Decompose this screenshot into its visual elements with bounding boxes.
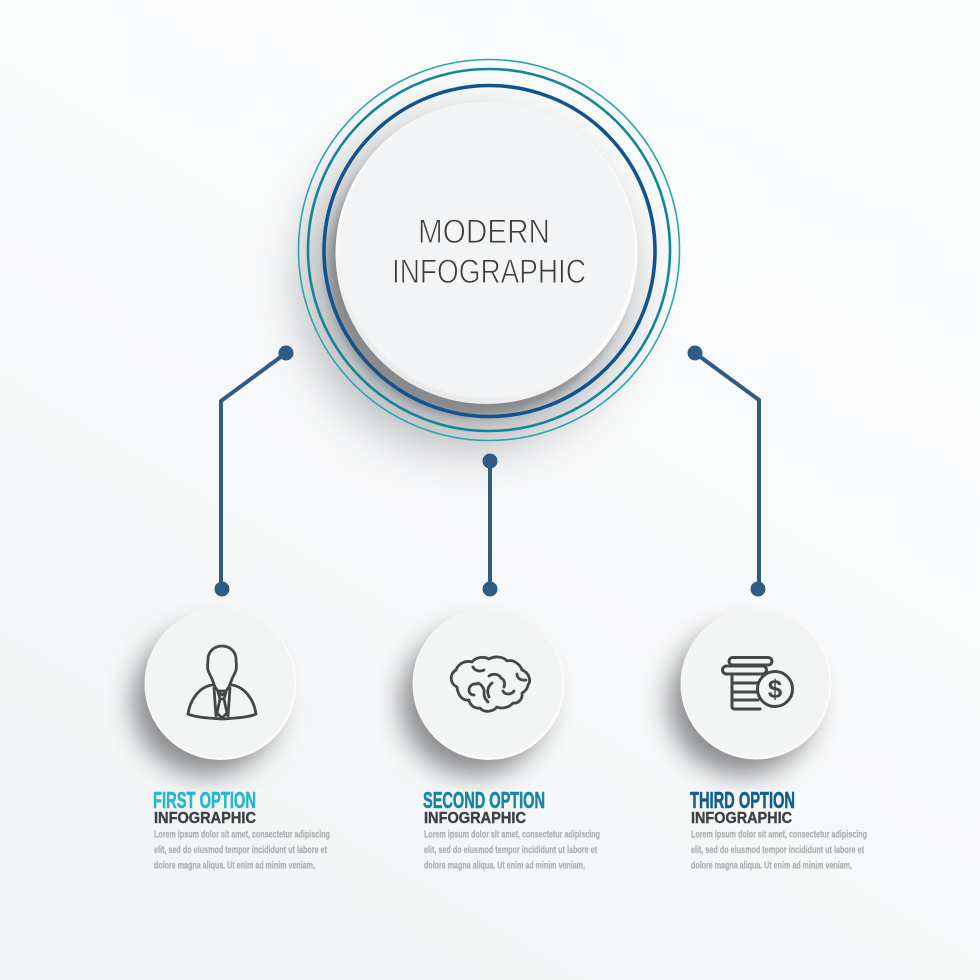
body text: second option bbox=[424, 828, 600, 872]
hub title: MODERN bbox=[418, 213, 550, 251]
body text: first option bbox=[154, 828, 330, 872]
body text: third option bbox=[691, 828, 867, 872]
subheading: third option: INFOGRAPHIC bbox=[691, 810, 792, 827]
disc: second option bbox=[401, 608, 564, 775]
disc: first option bbox=[133, 608, 296, 775]
subheading: second option: INFOGRAPHIC bbox=[424, 810, 526, 827]
icon: coins bbox=[722, 658, 792, 709]
panel: third option bbox=[669, 608, 867, 872]
icon: coins: $ bbox=[768, 674, 783, 704]
body text: first option: Lorem ipsum dolor sit amet, consectetur adipiscing bbox=[154, 828, 330, 840]
body text: second option: elit, sed do eiusmod tempor incididunt ut labore et bbox=[424, 844, 597, 856]
body text: third option: Lorem ipsum dolor sit amet, consectetur adipiscing bbox=[691, 828, 867, 840]
body text: third option: elit, sed do eiusmod tempor incididunt ut labore et bbox=[691, 844, 864, 856]
connector: second option bbox=[482, 454, 498, 596]
panel: second option bbox=[401, 608, 600, 872]
central hub bbox=[298, 60, 680, 449]
body text: second option: Lorem ipsum dolor sit amet, consectetur adipiscing bbox=[424, 828, 600, 840]
icon: brain bbox=[451, 657, 530, 711]
hub title: INFOGRAPHIC bbox=[392, 253, 586, 291]
hub title bbox=[392, 213, 586, 291]
connector: third option bbox=[688, 346, 766, 596]
body text: first option: elit, sed do eiusmod tempor incididunt ut labore et bbox=[154, 844, 327, 856]
disc: third option bbox=[669, 608, 832, 775]
subheading: first option: INFOGRAPHIC bbox=[154, 810, 256, 827]
body text: third option: dolore magna aliqua. Ut enim ad minim veniam, bbox=[691, 860, 852, 872]
heading: first option: FIRST OPTION bbox=[153, 787, 256, 813]
heading: third option: THIRD OPTION bbox=[690, 787, 795, 813]
connector: first option bbox=[214, 346, 294, 596]
icon: businessman bbox=[188, 646, 256, 719]
body text: second option: dolore magna aliqua. Ut enim ad minim veniam, bbox=[424, 860, 585, 872]
panel: first option bbox=[133, 608, 330, 872]
body text: first option: dolore magna aliqua. Ut enim ad minim veniam, bbox=[154, 860, 315, 872]
heading: second option: SECOND OPTION bbox=[423, 787, 545, 813]
